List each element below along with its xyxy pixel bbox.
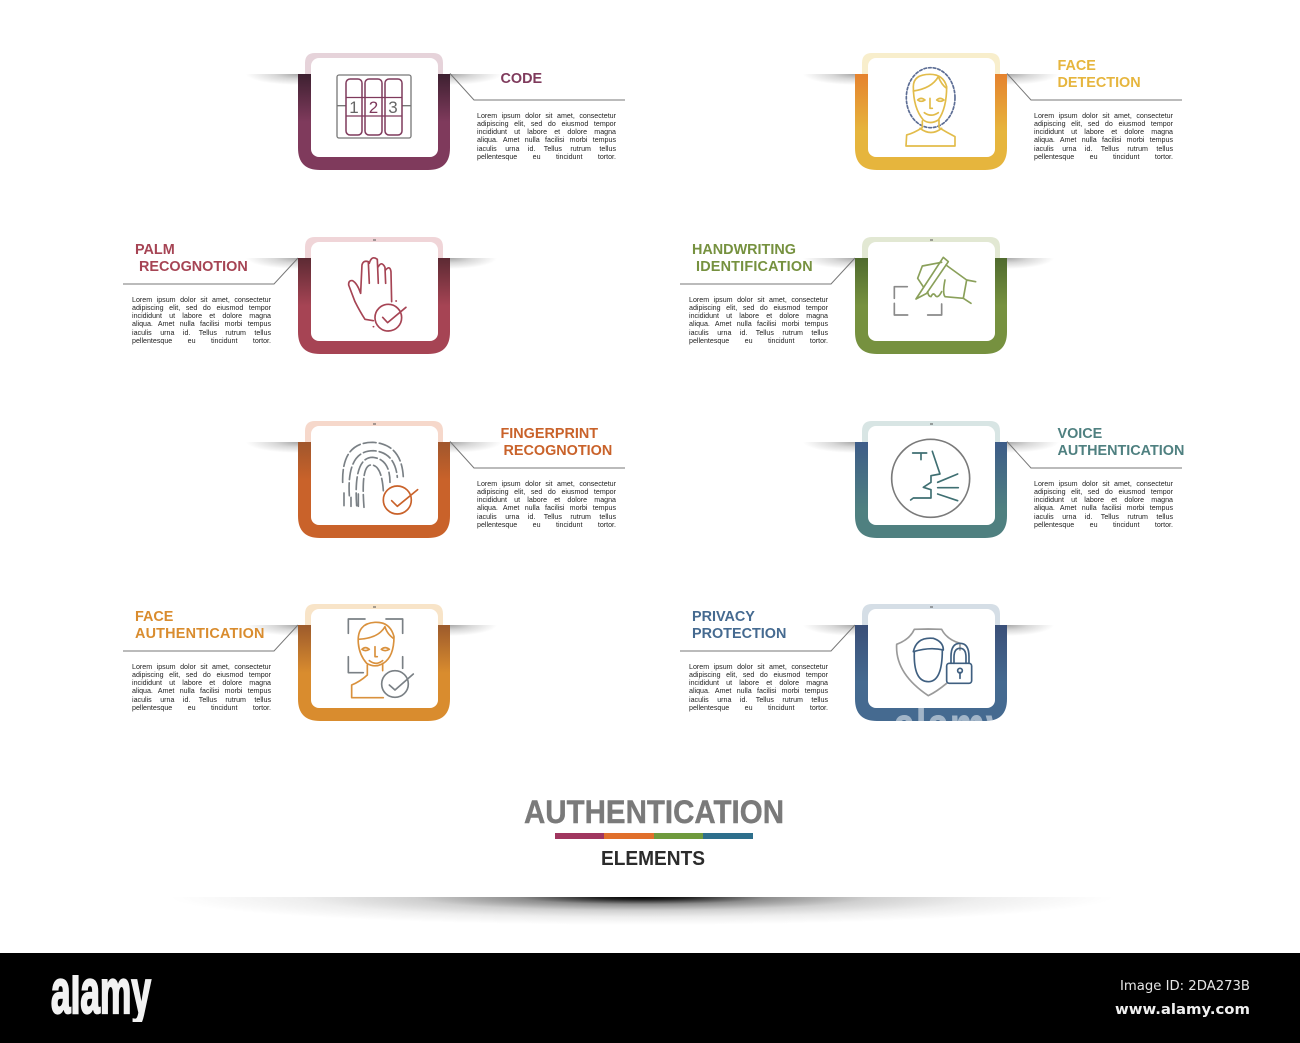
description: fingerprint	[477, 480, 616, 529]
heading: face detection	[1058, 58, 1141, 91]
heading: handwriting identification: IDENTIFICATION	[696, 259, 813, 275]
card with privacy icon	[680, 604, 1048, 721]
heading: fingerprint recognotion	[500, 426, 612, 459]
description: privacy: adipiscing elit, sed do eiusmod tempor	[689, 671, 828, 679]
footer: stock credit band	[0, 953, 1300, 1043]
subtitle: ELEMENTS	[601, 848, 705, 870]
panel: code	[252, 53, 625, 170]
card with voice icon	[809, 421, 1182, 538]
description: privacy: Lorem ipsum dolor sit amet, consectetur	[689, 663, 828, 671]
icon: code lock: 3	[388, 98, 398, 117]
icon: code lock: 2	[369, 98, 378, 117]
description: face authentication: adipiscing elit, sed do eiusmod tempor	[132, 671, 271, 679]
description: voice: pellentesque eu tincidunt tortor.	[1034, 521, 1173, 529]
description: privacy: incididunt ut labore et dolore magna	[689, 679, 828, 687]
card with face detection icon	[809, 53, 1182, 170]
icon: face authentication	[348, 619, 413, 698]
heading: handwriting identification	[692, 242, 813, 275]
icon: voice	[892, 439, 970, 517]
heading: voice authentication: AUTHENTICATION	[1058, 443, 1184, 459]
description: code: Lorem ipsum dolor sit amet, consectetur	[477, 112, 616, 120]
icon: handwriting	[894, 257, 976, 315]
heading: face authentication: AUTHENTICATION	[135, 626, 265, 642]
card with code icon	[252, 53, 625, 170]
description: face detection: Lorem ipsum dolor sit amet, consectetur	[1034, 112, 1173, 120]
description: handwriting: Lorem ipsum dolor sit amet, consectetur	[689, 296, 828, 304]
card with handwriting icon	[680, 237, 1048, 354]
heading: face detection: DETECTION	[1058, 75, 1141, 91]
text: alamy	[893, 694, 1008, 757]
description: face detection: iaculis urna id. Tellus rutrum tellus	[1034, 145, 1173, 153]
description: fingerprint: iaculis urna id. Tellus rutrum tellus	[477, 513, 616, 521]
heading: palm recognotion: PALM	[135, 242, 175, 258]
description: fingerprint: adipiscing elit, sed do eiusmod tempor	[477, 488, 616, 496]
icon: code lock	[337, 75, 411, 138]
panel: voice authentication	[809, 421, 1184, 538]
footer url: www.alamy.com	[1115, 1002, 1250, 1018]
description: handwriting: iaculis urna id. Tellus rutrum tellus	[689, 329, 828, 337]
description: voice	[1034, 480, 1173, 529]
description: code: incididunt ut labore et dolore magna	[477, 128, 616, 136]
heading: privacy protection: PRIVACY	[692, 609, 755, 625]
panel: face authentication	[123, 604, 492, 721]
description: face detection	[1034, 112, 1173, 161]
card with palm icon	[123, 237, 492, 354]
description: palm: iaculis urna id. Tellus rutrum tellus	[132, 329, 271, 337]
heading: privacy protection: PROTECTION	[692, 626, 786, 642]
description: face detection: pellentesque eu tincidunt tortor.	[1034, 153, 1173, 161]
description: palm: aliqua. Amet nulla facilisi morbi tempus	[132, 320, 271, 328]
description: fingerprint: incididunt ut labore et dolore magna	[477, 496, 616, 504]
icon: face detection	[906, 68, 955, 146]
icon: privacy shield with lock	[897, 629, 972, 696]
description: privacy: aliqua. Amet nulla facilisi morbi tempus	[689, 687, 828, 695]
title block	[524, 794, 784, 870]
icon: fingerprint with check	[343, 442, 418, 514]
colour bar	[555, 833, 753, 839]
description: privacy: pellentesque eu tincidunt tortor.	[689, 704, 828, 712]
description: privacy: iaculis urna id. Tellus rutrum tellus	[689, 696, 828, 704]
heading: palm recognotion	[135, 242, 248, 275]
main title: AUTHENTICATION	[524, 794, 784, 830]
description: palm: adipiscing elit, sed do eiusmod tempor	[132, 304, 271, 312]
description: voice: adipiscing elit, sed do eiusmod tempor	[1034, 488, 1173, 496]
icon: code lock: 1	[349, 98, 359, 117]
heading: code: CODE	[500, 71, 542, 87]
panel: privacy protection	[680, 604, 1048, 721]
footer logo: alamy	[51, 958, 151, 1027]
description: handwriting	[689, 296, 828, 345]
description: code	[477, 112, 616, 161]
panel: fingerprint recognotion	[252, 421, 625, 538]
heading: voice authentication	[1058, 426, 1184, 459]
description: code: pellentesque eu tincidunt tortor.	[477, 153, 616, 161]
description: fingerprint: Lorem ipsum dolor sit amet, consectetur	[477, 480, 616, 488]
description: code: iaculis urna id. Tellus rutrum tellus	[477, 145, 616, 153]
heading: palm recognotion: RECOGNOTION	[139, 259, 248, 275]
description: fingerprint: aliqua. Amet nulla facilisi morbi tempus	[477, 504, 616, 512]
ground shadow	[233, 897, 1050, 922]
description: palm: pellentesque eu tincidunt tortor.	[132, 337, 271, 345]
heading: face authentication: FACE	[135, 609, 173, 625]
description: fingerprint: pellentesque eu tincidunt tortor.	[477, 521, 616, 529]
heading: face detection: FACE	[1058, 58, 1096, 74]
heading: fingerprint recognotion: FINGERPRINT	[500, 426, 598, 442]
description: face detection: incididunt ut labore et dolore magna	[1034, 128, 1173, 136]
panel: palm recognotion	[123, 237, 492, 354]
description: voice: Lorem ipsum dolor sit amet, consectetur	[1034, 480, 1173, 488]
description: face authentication: Lorem ipsum dolor sit amet, consectetur	[132, 663, 271, 671]
description: face authentication: iaculis urna id. Tellus rutrum tellus	[132, 696, 271, 704]
description: handwriting: aliqua. Amet nulla facilisi morbi tempus	[689, 320, 828, 328]
description: face authentication: aliqua. Amet nulla facilisi morbi tempus	[132, 687, 271, 695]
description: face authentication: incididunt ut labore et dolore magna	[132, 679, 271, 687]
image id: Image ID: 2DA273B	[1120, 978, 1250, 994]
description: handwriting: incididunt ut labore et dolore magna	[689, 312, 828, 320]
description: privacy	[689, 663, 828, 712]
heading: handwriting identification: HANDWRITING	[692, 242, 796, 258]
description: voice: incididunt ut labore et dolore magna	[1034, 496, 1173, 504]
description: voice: aliqua. Amet nulla facilisi morbi tempus	[1034, 504, 1173, 512]
description: face detection: adipiscing elit, sed do eiusmod tempor	[1034, 120, 1173, 128]
card with fingerprint icon	[252, 421, 625, 538]
panel: face detection	[809, 53, 1182, 170]
heading: privacy protection	[692, 609, 786, 642]
description: handwriting: adipiscing elit, sed do eiusmod tempor	[689, 304, 828, 312]
description: face authentication: pellentesque eu tincidunt tortor.	[132, 704, 271, 712]
icon: palm with check	[349, 258, 406, 331]
description: handwriting: pellentesque eu tincidunt tortor.	[689, 337, 828, 345]
description: palm: Lorem ipsum dolor sit amet, consectetur	[132, 296, 271, 304]
description: code: aliqua. Amet nulla facilisi morbi tempus	[477, 136, 616, 144]
description: face detection: aliqua. Amet nulla facilisi morbi tempus	[1034, 136, 1173, 144]
heading: fingerprint recognotion: RECOGNOTION	[504, 443, 612, 459]
card with face authentication icon	[123, 604, 492, 721]
description: palm: incididunt ut labore et dolore magna	[132, 312, 271, 320]
description: palm	[132, 296, 271, 345]
description: code: adipiscing elit, sed do eiusmod tempor	[477, 120, 616, 128]
description: voice: iaculis urna id. Tellus rutrum tellus	[1034, 513, 1173, 521]
description: face authentication	[132, 663, 271, 712]
heading: voice authentication: VOICE	[1058, 426, 1102, 442]
heading: face authentication	[135, 609, 265, 642]
panel: handwriting identification	[680, 237, 1048, 354]
